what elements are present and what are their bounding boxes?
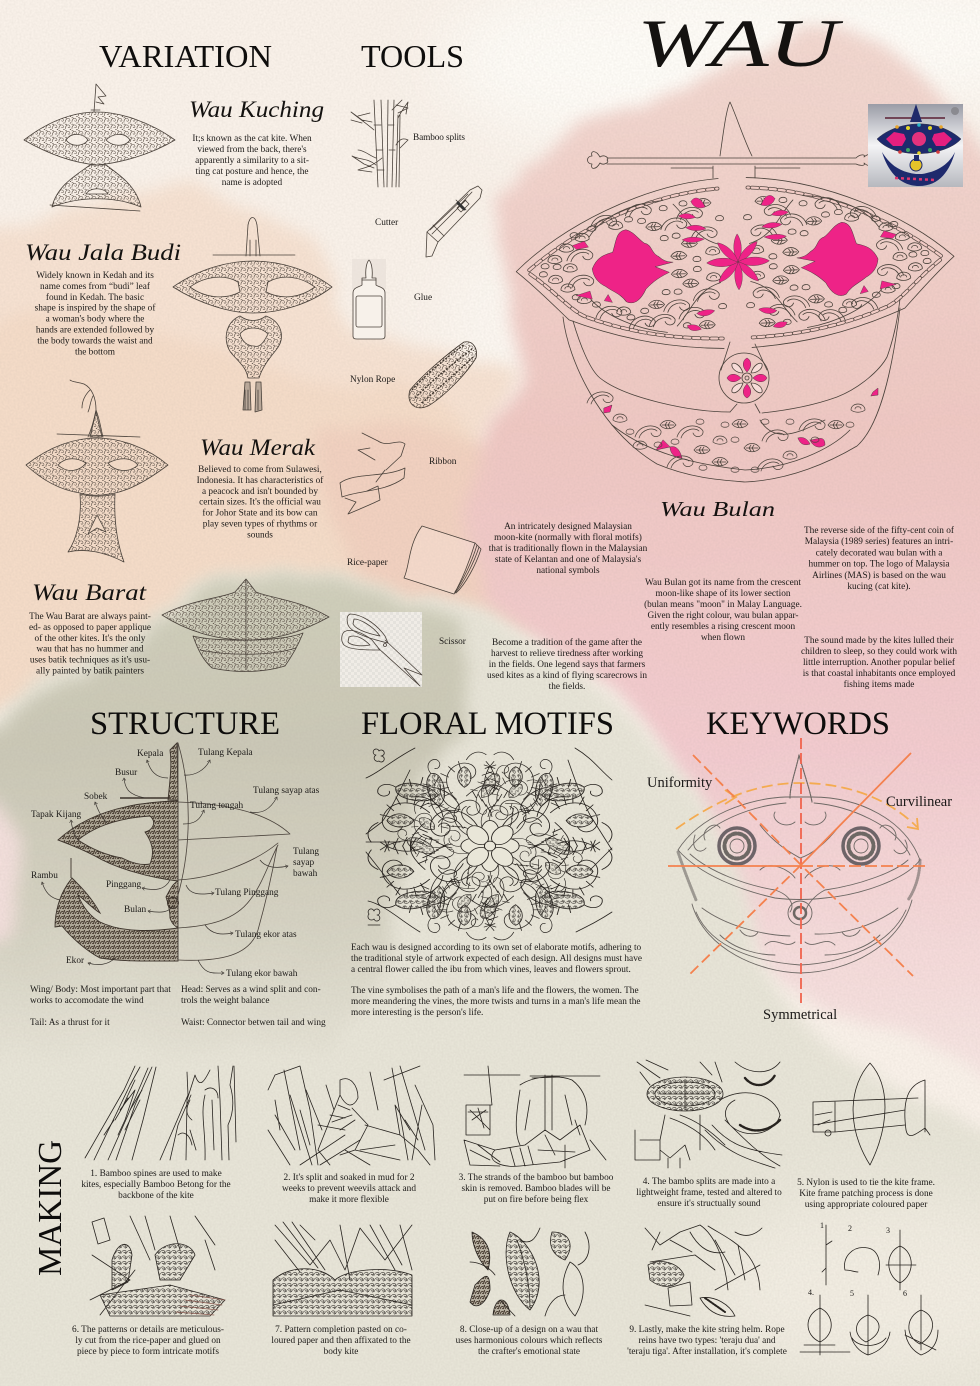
heading: wau kuching: Wau Kuching [189, 97, 324, 122]
caption: step 1: backbone of the kite [118, 1190, 194, 1201]
heading: floral motifs: FLORAL MOTIFS [361, 706, 614, 742]
labels: kite parts: Rambu [31, 871, 58, 881]
heading: wau bulan: Wau Bulan [660, 497, 775, 521]
heading: wau jala budi: Wau Jala Budi [25, 240, 181, 265]
text: structure notes left: Wing/ Body: Most important part that [30, 985, 171, 995]
text: wau kuching: ting cat posture and hence, the [195, 167, 309, 177]
text: floral motifs description: more meandering the vines, the more twists and turns in a man's life mean the [351, 996, 641, 1007]
icon: floral corners [366, 748, 612, 932]
text: wau jala budi: shape is inspired by the shape of [35, 303, 156, 314]
text: wau bulan name: Wau Bulan got its name from the crescent [645, 577, 801, 588]
caption: step 7: loured paper and then affixated to the [271, 1335, 411, 1346]
step 10 illustration: frame assembly numbered: 2 [848, 1224, 852, 1233]
text: wau jala budi: Widely known in Kedah and its [36, 271, 154, 281]
caption: step 6: 6. The patterns or details are meticulous- [72, 1325, 224, 1335]
caption: step 8: 8. Close-up of a design on a wau that [460, 1324, 598, 1335]
text: wau merak: Believed to come from Sulawesi, [198, 464, 322, 475]
heading: keywords: KEYWORDS [706, 706, 890, 742]
text: wau bulan tradition: harvest to relieve tiredness after working [491, 648, 643, 659]
text: wau jala budi: found in Kedah. The basic [46, 292, 144, 303]
text: wau merak: play seven types of rhythms or [203, 518, 318, 530]
text: wau barat: uses batik techniques as it's usu- [30, 656, 150, 666]
caption: step 1: 1. Bamboo spines are used to make [90, 1169, 222, 1179]
caption: step 2: 2. It's split and soaked in mud for 2 [283, 1172, 415, 1183]
labels: kite parts: Tulang tengah [190, 801, 243, 811]
text: wau bulan sound: is that coastal inhabitants once employed [803, 669, 956, 679]
text: wau kuching: viewed from the back, there's [197, 144, 307, 155]
text: wau kuching: apparently a similarity to a sit- [195, 156, 309, 166]
text: wau bulan sound: fishing items made [844, 679, 914, 690]
text: wau bulan sound: The sound made by the kites lulled their [804, 636, 955, 646]
label: scissor: Scissor [439, 637, 467, 647]
caption: step 5: using appropriate coloured paper [805, 1200, 928, 1210]
text: wau merak: for Johor State and its bow can [202, 508, 318, 519]
labels: kite parts: Tapak Kijang [31, 810, 82, 820]
labels: kite parts: Tulang [293, 847, 319, 857]
text: floral motifs description: more interesting is the person's life. [351, 1007, 483, 1018]
step 10 illustration: frame assembly numbered: 5 [850, 1289, 854, 1298]
text: wau barat: of the other kites. It's the only [35, 633, 146, 644]
label: ribbon: Ribbon [429, 457, 457, 467]
icon: nylon rope [409, 342, 476, 408]
text: wau barat: The Wau Barat are always paint- [29, 612, 151, 622]
text: wau kuching: name is adopted [222, 178, 283, 188]
heading: tools: TOOLS [361, 39, 464, 74]
step 10 illustration: frame assembly numbered [800, 1221, 938, 1355]
caption: step 9: 'teraju tiga'. After installation, it's complete [627, 1346, 787, 1357]
text: floral motifs description: The vine symbolises the path of a man's life and the flowers, the women. The [351, 985, 639, 996]
heading: structure: STRUCTURE [90, 706, 280, 742]
step 6 illustration: cutting motifs [90, 1216, 225, 1316]
caption: step 5: Kite frame patching process is done [799, 1188, 933, 1199]
labels: kite parts: Bulan [124, 905, 147, 915]
icon: rice paper [404, 526, 481, 594]
labels: kite parts: Tulang Kepala [198, 748, 253, 758]
panel: floral motifs drawing [351, 748, 642, 1018]
icon: main kite waist and crescent tail [563, 299, 900, 482]
caption: step 4: 4. The bambo splits are made into a [643, 1177, 775, 1187]
text: structure notes right: Head: Serves as a wind split and con- [181, 985, 321, 995]
caption: step 3: skin is removed. Bamboo blades will be [462, 1184, 610, 1194]
icon: kite anatomy left half [55, 743, 178, 961]
caption: step 9: reins have two types: 'teraju dua' and [638, 1336, 776, 1346]
text: wau bulan description: national symbols [536, 566, 600, 576]
text: wau barat: ally painted by batik painters [36, 666, 144, 676]
text: wau bulan coin: cately decorated wau bulan with a [816, 548, 942, 558]
labels: kite parts: Tulang sayap atas [253, 786, 320, 796]
step 10 illustration: frame assembly numbered: 3 [886, 1226, 890, 1235]
text: wau jala budi: hands are extended followed by [36, 324, 154, 336]
text: wau bulan description: moon-kite (normally with floral motifs) [494, 532, 642, 543]
labels: kite parts: Tulang ekor bawah [226, 969, 298, 979]
caption: step 3: 3. The strands of the bamboo but bamboo [459, 1172, 614, 1183]
step 10 illustration: frame assembly numbered: 6 [903, 1289, 907, 1298]
text: structure notes left: works to accomodate the wind [30, 996, 144, 1006]
labels: kite parts: Ekor [66, 956, 85, 966]
label: rice-paper: Rice-paper [347, 558, 389, 568]
icon: wau kuching kite [24, 84, 175, 211]
text: wau bulan coin: Airlines (MAS) is based on the wau [812, 570, 946, 581]
arrow: curvilinear dashed arc [676, 783, 918, 829]
caption: step 8: the crafter's emotional state [478, 1346, 580, 1357]
step 7 illustration: pattern completion [273, 1222, 412, 1316]
text: wau jala budi: a woman's body where the [46, 315, 144, 325]
text: structure notes left: Tail: As a thrust for it [30, 1017, 110, 1028]
text: wau bulan tradition: Become a tradition of the game after the [492, 637, 642, 648]
icon: central pink flower [706, 233, 770, 291]
text: wau merak: certain sizes. It's the official wau [199, 497, 321, 508]
label: nylon rope: Nylon Rope [350, 375, 395, 385]
text: wau bulan description: state of Kelantan and one of Malaysia's [495, 554, 642, 565]
step 8 illustration: close-up design [470, 1228, 589, 1316]
text: wau jala budi: name comes from “budi” leaf [40, 281, 151, 292]
icon: wau barat kite [162, 579, 329, 672]
text: wau kuching: It;s known as the cat kite. When [192, 134, 312, 144]
text: wau bulan tradition: used kites as a kind of flying scarecrows in [487, 670, 647, 681]
icon: ribbon [340, 433, 405, 514]
heading: wau merak: Wau Merak [200, 435, 316, 460]
text: wau bulan name: Given the right colour, wau bulan appar- [648, 611, 798, 621]
step 2 illustration: man splitting [268, 1066, 435, 1165]
label: uniformity: Uniformity [647, 775, 713, 791]
text: wau bulan tradition: in the fields. One legend says that farmers [489, 659, 646, 670]
step 9 illustration: string helm [645, 1225, 762, 1316]
label: curvilinear: Curvilinear [886, 794, 952, 810]
caption: step 9: 9. Lastly, make the kite string helm. Rope [629, 1325, 785, 1335]
thumbnail: coloured kite [868, 104, 963, 187]
text: wau bulan name: ently resembles a rising crescent moon [651, 622, 796, 632]
text: wau bulan name: when flown [701, 632, 745, 643]
icon: wau jala budi kite [173, 218, 332, 412]
caption: step 3: put on fire before being flex [484, 1194, 589, 1205]
panel: making steps [72, 1060, 938, 1357]
text: wau jala budi: the bottom [75, 347, 116, 357]
caption: step 4: ensure it's structually sound [657, 1199, 761, 1209]
caption: step 7: 7. Pattern completion pasted on co- [275, 1325, 407, 1335]
text: wau bulan name: moon-like shape of its lower section [655, 588, 791, 599]
step 10 illustration: frame assembly numbered: 1 [820, 1221, 824, 1230]
text: wau bulan sound: children to sleep, so they could work with [801, 647, 957, 657]
caption: step 4: lightweight frame, tested and altered to [636, 1187, 782, 1198]
panel: wau bulan main kite wing [513, 170, 957, 356]
labels: kite parts: Pinggang [106, 880, 141, 890]
label: glue: Glue [414, 293, 432, 303]
text: wau merak: Indonesia. It has characteristics of [197, 475, 324, 486]
panel: tools [340, 100, 482, 687]
step 4 illustration: frame building [635, 1060, 782, 1168]
icon: cutter [426, 186, 482, 257]
icon: bamboo [351, 100, 408, 187]
step 10 illustration: frame assembly numbered: 4. [808, 1288, 814, 1297]
text: wau bulan coin: Malaysia (1989 series) features an intri- [805, 536, 953, 547]
labels: kite parts: Sobek [84, 792, 108, 802]
caption: step 6: piece by piece to form intricate motifs [77, 1346, 219, 1357]
labels: kite parts: bawah [293, 869, 318, 879]
text: wau jala budi: the body towards the waist and [37, 336, 153, 346]
text: wau bulan name: (bulan means "moon" in Malay Language. [644, 599, 802, 610]
caption: step 7: body kite [324, 1347, 358, 1357]
arrows: part callouts [42, 760, 288, 973]
text: floral motifs description: Each wau is designed according to its own set of elaborate motifs, adhering to [351, 942, 642, 953]
step 1 illustration: bamboo [85, 1066, 236, 1160]
labels: kite parts: sayap [293, 858, 315, 868]
caption: step 1: kites, especially Bamboo Betong for the [81, 1179, 231, 1190]
panel: keywords diagram [647, 738, 952, 1023]
label: symmetrical: Symmetrical [763, 1007, 837, 1023]
lines: radial orange axes [668, 738, 929, 1003]
text: wau barat: ed- as opposed to paper applique [29, 623, 151, 633]
step 5 illustration: kite frame [813, 1063, 930, 1165]
labels: kite parts: Tulang Pinggang [215, 888, 279, 898]
text: floral motifs description: a central flower called the ibu from which vines, leaves and flowers sprout. [351, 964, 631, 975]
step 3 illustration: man seated [464, 1066, 606, 1168]
labels: kite parts: Busur [115, 768, 138, 778]
icon: kite anatomy right half [176, 743, 290, 961]
labels: kite parts [31, 748, 320, 979]
labels: kite parts: Kepala [137, 749, 163, 759]
text: wau bulan description: An intricately designed Malaysian [504, 522, 632, 532]
caption: step 6: ly cut from the rice-paper and glued on [75, 1335, 221, 1346]
text: wau bulan sound: little interruption. Another popular belief [803, 657, 956, 668]
text: wau barat: wau that has no hummer and [36, 645, 144, 655]
text: wau merak: a peacock and isn't bounded by [202, 487, 318, 497]
label: cutter: Cutter [375, 218, 399, 228]
icon: floral mandala [368, 752, 612, 940]
text: wau bulan coin: hummer on top. The logo of Malaysia [808, 559, 950, 570]
text: wau bulan coin: kucing (cat kite). [847, 581, 911, 592]
caption: step 5: 5. Nylon is used to tie the kite frame. [797, 1177, 935, 1188]
caption: step 2: make it more flexible [309, 1194, 389, 1205]
text: wau bulan tradition: the fields. [549, 681, 585, 692]
heading: making: MAKING [32, 1140, 69, 1276]
text: structure notes right: Waist: Connector betwen tail and wing [181, 1018, 326, 1028]
icon: main kite head and bow [588, 102, 874, 178]
text: structure notes right: trols the weight balance [181, 996, 270, 1006]
panel: variation [24, 84, 332, 676]
panel: structure diagram [30, 743, 326, 1028]
text: wau bulan description: that is traditionally flown in the Malaysian [489, 543, 648, 554]
text: floral motifs description: the traditional style of artwork expected of each design. All designs must have [351, 953, 642, 964]
icon: glue bottle [352, 259, 386, 339]
icon: grey kite sketch [678, 755, 920, 973]
icon: scissors [340, 612, 422, 687]
icon: wau merak kite [26, 380, 168, 562]
text: wau bulan coin: The reverse side of the fifty-cent coin of [804, 525, 955, 536]
heading: variation: VARIATION [99, 39, 272, 74]
label: bamboo splits: Bamboo splits [413, 133, 465, 143]
title: WAU [637, 5, 843, 81]
labels: kite parts: Tulang ekor atas [235, 930, 297, 940]
caption: step 8: uses harmonious colours which reflects [456, 1335, 603, 1346]
caption: step 2: weeks to prevent weevils attack and [282, 1184, 416, 1194]
heading: wau barat: Wau Barat [32, 580, 147, 605]
text: wau merak: sounds [247, 530, 273, 540]
